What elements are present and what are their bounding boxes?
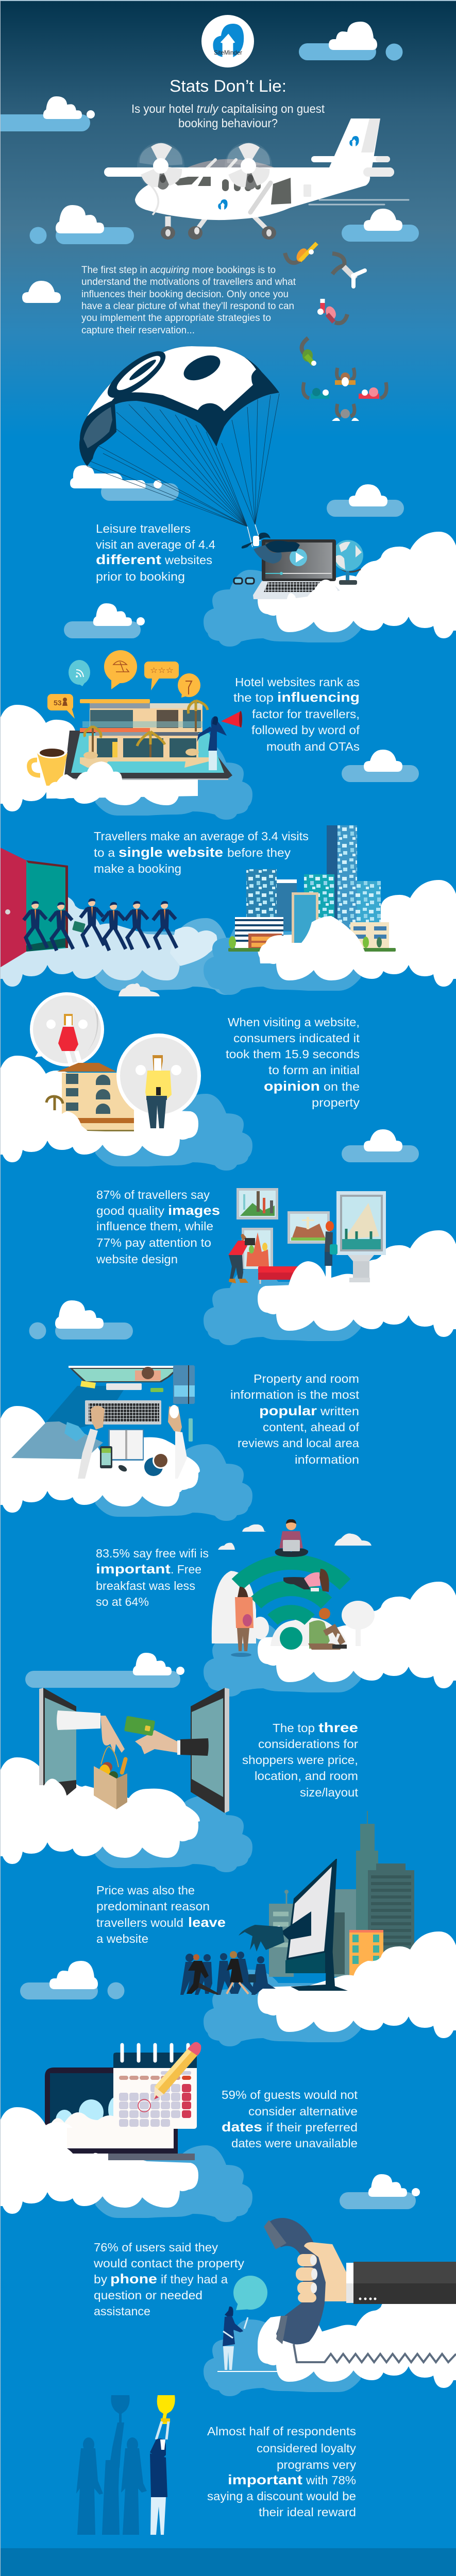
- cloud: lower right of plane: [342, 209, 419, 242]
- text: popular: reviews and local area: [238, 1436, 359, 1450]
- text: hotel websites: [233, 675, 360, 753]
- brick building: [248, 934, 282, 948]
- screen clouds: [50, 2097, 174, 2148]
- left edge: [0, 0, 1, 2576]
- text: single website: single website: [119, 844, 223, 860]
- cloud: left of leave: [20, 1961, 125, 1999]
- keyboard: [85, 1400, 161, 1425]
- laptop base: [76, 2154, 195, 2160]
- reaching hand: [239, 1911, 311, 1952]
- laptop screen: [262, 539, 336, 581]
- text: opinion: property: [312, 1096, 360, 1109]
- skydiver 3: [317, 299, 347, 323]
- skydiver 2: [332, 253, 365, 286]
- towers: [246, 825, 381, 948]
- text: opinion: to form an initial: [268, 1063, 360, 1077]
- tail fin: [329, 118, 380, 167]
- gallery illustration: [204, 1188, 456, 1345]
- text: images: 77% pay attention to: [96, 1236, 211, 1249]
- folders: [64, 1422, 86, 1442]
- subtitle: [131, 102, 325, 130]
- text: popular: information is the most: [230, 1388, 360, 1401]
- intro paragraph: have a clear picture of what they’ll respond to can: [81, 301, 294, 312]
- front cloud lobes: [46, 2136, 129, 2184]
- stabiliser: [311, 156, 390, 162]
- skydiver figure: [242, 524, 300, 564]
- text: opinion: consumers indicated it: [233, 1031, 360, 1045]
- lying woman: [283, 1569, 329, 1592]
- man: [145, 1055, 172, 1128]
- beach bubble: [104, 650, 137, 689]
- doorway: [26, 860, 67, 952]
- text: leisure travellers: different: [96, 552, 161, 567]
- white cloud: [258, 1230, 456, 1337]
- logo wordmark: SiteMinder: [214, 49, 242, 56]
- title: Stats Don’t Lie:: [170, 77, 286, 95]
- keyboard: [264, 582, 325, 592]
- runners: [24, 899, 177, 951]
- text: images: influence them, while: [96, 1219, 213, 1233]
- text: images: 87% of travellers say: [96, 1188, 210, 1201]
- trees and lobes: [251, 1601, 375, 1646]
- text: leisure travellers: visit an average of 4.4: [96, 538, 215, 551]
- tablets illustration: [0, 1688, 252, 1872]
- cloud: above tablets: [25, 1653, 184, 1688]
- cloud lobe behind foot: [351, 1961, 386, 1989]
- video play button: [290, 549, 307, 566]
- text: single website: to a: [94, 846, 115, 859]
- ground and trees: [228, 936, 396, 952]
- small cloud under city: [119, 983, 160, 996]
- weekday headers: [119, 2071, 191, 2080]
- cloud: lower left of plane: [30, 205, 134, 244]
- text: loyalty: Almost half of respondents: [207, 2425, 356, 2438]
- back cloud: [95, 918, 252, 995]
- suspension lines: [87, 394, 279, 527]
- text: opinion: [226, 1015, 360, 1109]
- white cloud: [0, 1757, 198, 1864]
- stars bubble: ☆☆☆: [150, 666, 174, 675]
- man in green: [308, 1608, 347, 1650]
- woman with megaphone: [197, 711, 242, 770]
- glasses: [234, 578, 254, 584]
- text: leave: travellers would: [96, 1916, 183, 1929]
- coffee: [144, 1452, 169, 1476]
- text: leisure travellers: Leisure travellers: [96, 522, 191, 535]
- text: dates: dates: [222, 2119, 262, 2134]
- text: leisure travellers: [96, 522, 215, 583]
- text: three considerations: three: [318, 1720, 358, 1735]
- cloud: top right: [299, 22, 403, 61]
- text: leave: predominant reason: [96, 1900, 210, 1913]
- desk illustration: [0, 1365, 252, 1521]
- propeller right: [224, 142, 274, 190]
- right tablet: [191, 1688, 229, 1813]
- back cloud: [204, 1268, 361, 1345]
- front cloud lobes: [52, 1111, 144, 1141]
- text: images: images: [168, 1202, 220, 1218]
- sky gradient: [0, 0, 456, 438]
- pale dome left: [212, 1571, 256, 1643]
- text: hotel websites: followed by word of: [251, 723, 360, 737]
- text: leave: leave: [188, 1914, 226, 1930]
- footer call to action band: [0, 2548, 456, 2576]
- white cloud: [258, 2281, 456, 2388]
- intro paragraph: [81, 265, 296, 336]
- cloud: right of dates: [340, 2174, 420, 2209]
- right sleeve: [175, 1431, 187, 1479]
- plane: [104, 118, 409, 240]
- laptop bottom bezel: [67, 2148, 178, 2154]
- white cloud: [258, 1931, 456, 2038]
- wing shadow: [167, 159, 295, 198]
- intro paragraph: The first step in acquiring more bookings is to: [81, 265, 276, 276]
- hotel opinion illustration: [0, 992, 252, 1171]
- text: loyalty: programs very: [277, 2458, 357, 2471]
- left hand: [91, 1405, 105, 1430]
- text: popular: information: [295, 1453, 359, 1466]
- logo badge: [201, 15, 254, 67]
- text: dates: 59% of guests would not: [222, 2088, 358, 2102]
- door and runners illustration: [0, 848, 252, 995]
- front cloud lobes: [286, 580, 341, 608]
- phone illustration: [204, 2218, 456, 2396]
- top edge: [0, 0, 456, 1]
- weekend cells: [182, 2084, 191, 2118]
- pen: [189, 1418, 193, 1442]
- picture: statue: [288, 1211, 330, 1244]
- monitor: [285, 1859, 348, 1991]
- hotel on tablet: [80, 699, 209, 768]
- guests bubble: [47, 694, 75, 719]
- text: single website: Travellers make an average of 3.4 visits: [94, 829, 309, 843]
- credit card: [124, 1716, 155, 1736]
- text: dates: dates were unavailable: [231, 2137, 358, 2150]
- door: [0, 848, 26, 968]
- white cloud: [258, 880, 456, 987]
- back cloud: [95, 1094, 252, 1171]
- eraser: [117, 1464, 128, 1473]
- back cloud: [204, 1970, 361, 2046]
- sleeve: [346, 2262, 456, 2304]
- phone cord: [294, 2344, 456, 2362]
- text: three considerations: [242, 1720, 359, 1799]
- white cloud: [258, 1582, 456, 1688]
- silhouette group: [76, 2395, 147, 2535]
- running man: [187, 1954, 219, 1995]
- text: opinion: opinion: [264, 1078, 320, 1094]
- text: wifi: [96, 1547, 209, 1608]
- cloud: left of parachute: [70, 465, 179, 501]
- text: phone: would contact the property: [93, 2257, 245, 2270]
- trophy: [157, 2395, 175, 2424]
- front cloud lobes: [259, 916, 365, 963]
- text: wifi: so at 64%: [96, 1595, 149, 1608]
- skydiver group: [303, 368, 386, 421]
- floor line: [217, 2371, 278, 2372]
- parachute: [79, 344, 279, 527]
- cockpit windows: [172, 174, 211, 186]
- speech bubble: [233, 2276, 267, 2310]
- back cloud: [204, 570, 361, 647]
- palm: [304, 2244, 346, 2301]
- back cloud: [95, 743, 252, 820]
- man on top: [275, 1519, 308, 1557]
- canopy logo: [101, 344, 172, 405]
- cloud: white left of intro: [22, 281, 61, 303]
- logo mark: [213, 24, 244, 57]
- white hump: [80, 1436, 200, 1494]
- text: popular: content, ahead of: [263, 1420, 360, 1434]
- cloud: right of hotel: [342, 750, 419, 782]
- globe: [332, 540, 363, 585]
- monitor city illustration: [180, 1811, 456, 2046]
- engine left: [156, 168, 170, 190]
- canopy hole: [180, 350, 224, 385]
- wifi symbol: [237, 1562, 345, 1650]
- striped building: [235, 917, 283, 948]
- text: images: website design: [96, 1252, 178, 1266]
- text: loyalty: considered loyalty: [257, 2442, 357, 2455]
- cabin windows: [222, 179, 261, 191]
- text: leisure travellers: prior to booking: [96, 570, 185, 583]
- skydiver with laptop: [204, 524, 456, 647]
- beige building: [350, 922, 389, 948]
- monitor: [69, 1366, 179, 1390]
- text: single website: before they: [227, 846, 291, 859]
- text: loyalty: [207, 2425, 357, 2519]
- tablet: [64, 731, 232, 779]
- cloud: right of opinion: [342, 1129, 419, 1162]
- intro paragraph: capture their reservation...: [81, 325, 195, 336]
- text: dates: consider alternative: [248, 2105, 358, 2118]
- woman: [223, 2307, 248, 2370]
- right arm: [135, 1730, 209, 1756]
- shopping bag: [94, 1747, 128, 1809]
- video progress bar: [265, 572, 331, 575]
- cocktail bubble: [178, 673, 200, 698]
- coffee mug: [29, 744, 67, 786]
- subtitle: Is your hotel truly capitalising on guest: [131, 102, 325, 115]
- text: phone: [93, 2241, 245, 2318]
- picture: landmarks: [237, 1188, 278, 1219]
- text: single website: make a booking: [94, 862, 181, 875]
- guests bubble: 53: [54, 699, 62, 707]
- intro paragraph: understand the motivations of travellers and what: [81, 277, 296, 287]
- text: dates: if their preferred: [266, 2121, 358, 2134]
- text: wifi: . Free: [171, 1563, 201, 1576]
- text: phone: 76% of users said they: [94, 2241, 218, 2254]
- text: wifi: 83.5% say free wifi is: [96, 1547, 209, 1560]
- cloud: lower left of gallery: [29, 1300, 133, 1340]
- text: wifi: important: [96, 1561, 171, 1577]
- door: [271, 178, 291, 205]
- text: popular: written: [320, 1404, 359, 1418]
- text: opinion: took them 15.9 seconds: [226, 1047, 360, 1061]
- nose arc: [151, 185, 158, 215]
- text: popular: [230, 1372, 360, 1466]
- text: hotel websites: mouth and OTAs: [266, 740, 360, 753]
- hotel building: [46, 1063, 134, 1131]
- text: single website: [94, 829, 309, 875]
- stars bubble: [144, 662, 179, 690]
- orange building: [349, 1930, 383, 1985]
- front cloud lobes: [26, 1778, 155, 1834]
- phone: [100, 1446, 112, 1468]
- laptop screen: [50, 2073, 174, 2148]
- trophy illustration: [76, 2395, 175, 2535]
- wing struts: [206, 160, 236, 169]
- text: leave: [96, 1884, 226, 1945]
- picture: cathedral: [242, 1228, 273, 1269]
- desk shadow: [46, 1386, 126, 1432]
- text: phone: by: [94, 2273, 108, 2286]
- text: hotel websites: Hotel websites rank as: [235, 675, 360, 689]
- text: phone: if they had a: [161, 2273, 228, 2286]
- text: hotel websites: influencing: [277, 689, 360, 705]
- text: loyalty: with 78%: [306, 2473, 356, 2487]
- text: hotel websites: factor for travellers,: [252, 707, 360, 721]
- landing gear: [161, 212, 276, 240]
- column: [348, 1255, 374, 1282]
- mountain shadow: [11, 1421, 103, 1459]
- city skyline: [269, 1811, 414, 1977]
- white cloud: [0, 1406, 198, 1513]
- canopy: [79, 346, 279, 466]
- cloud: right of parachute: [327, 484, 404, 517]
- skydiver 1: [285, 243, 317, 264]
- text: opinion: When visiting a website,: [228, 1015, 360, 1029]
- cloud: upper left: [0, 96, 95, 131]
- white cloud: [0, 1056, 198, 1162]
- text: phone: question or needed: [94, 2289, 202, 2302]
- text: popular: popular: [259, 1403, 317, 1418]
- open notebook: [108, 1429, 144, 1461]
- city illustration: [204, 825, 456, 995]
- right hand: [168, 1406, 182, 1432]
- speed lines: [309, 200, 409, 205]
- calendar illustration: [0, 2042, 252, 2222]
- text: loyalty: important: [228, 2472, 302, 2487]
- white cloud: [0, 705, 198, 811]
- left arm: [57, 1710, 125, 1754]
- white shelf lobes: [67, 1786, 200, 1834]
- pale cloud right lobe: [170, 927, 217, 966]
- back cloud: [204, 918, 361, 995]
- engine right: [243, 168, 258, 190]
- skydiver 4: [302, 338, 316, 366]
- text: three considerations: shoppers were price,: [242, 1753, 358, 1767]
- canopy side panel: [83, 407, 112, 448]
- spiral notebook: [173, 1365, 195, 1404]
- small sky clouds near wifi: [218, 1524, 371, 1550]
- hotel website illustration: [0, 650, 252, 820]
- standing woman: [231, 1587, 254, 1657]
- date cells: [119, 2084, 180, 2127]
- pencil: [154, 2042, 201, 2099]
- cloud: above hotel section: [64, 603, 145, 638]
- text: wifi: breakfast was less: [96, 1579, 195, 1592]
- subtitle: booking behaviour?: [178, 116, 278, 130]
- picture: mountain: [336, 1191, 386, 1255]
- text: leave: a website: [96, 1932, 148, 1945]
- back cloud: [95, 1795, 252, 1872]
- white cloud: [258, 532, 456, 638]
- text: loyalty: saying a discount would be: [207, 2489, 356, 2503]
- text: leisure travellers: websites: [164, 553, 212, 567]
- red bench: [258, 1266, 301, 1284]
- intro paragraph: influences their booking decision. Only once you: [81, 289, 289, 300]
- text: leave: Price was also the: [96, 1884, 195, 1897]
- handset: [264, 2218, 326, 2344]
- running woman: [227, 1951, 256, 1994]
- intro paragraph: you implement the appropriate strategies to: [81, 313, 271, 324]
- text: images: good quality: [96, 1204, 165, 1217]
- calendar: [113, 2042, 201, 2129]
- crowd: [180, 1951, 276, 1995]
- text: three considerations: location, and room: [255, 1769, 358, 1783]
- wifi bubble: [69, 660, 90, 686]
- back cloud: [204, 2319, 361, 2396]
- text: three considerations: considerations for: [258, 1737, 358, 1751]
- upper wing: [104, 167, 394, 177]
- woman with trophy: [150, 2421, 168, 2535]
- text: hotel websites: the top: [233, 691, 274, 704]
- laptop frame: [45, 2067, 178, 2155]
- laptop screen bottom: [67, 2128, 174, 2148]
- text: three considerations: The top: [273, 1721, 315, 1735]
- text: phone: assistance: [94, 2304, 150, 2318]
- front cloud lobes: [289, 1261, 337, 1288]
- text: opinion: on the: [324, 1080, 360, 1093]
- laptop base right: [108, 2154, 195, 2160]
- text: popular: Property and room: [254, 1372, 359, 1385]
- back cloud: [204, 1620, 361, 1697]
- photographer: [228, 1234, 255, 1283]
- text: phone: phone: [110, 2271, 157, 2286]
- pale cloud: [0, 880, 198, 987]
- white cloud: [0, 2107, 198, 2214]
- speech bubble man: [116, 1033, 201, 1118]
- canopy white panel: [87, 346, 256, 416]
- rear panel: [303, 184, 311, 197]
- left sleeve: [78, 1429, 98, 1479]
- mouse: [170, 1405, 179, 1418]
- laptop base: [253, 581, 340, 599]
- back cloud: [95, 2145, 252, 2222]
- text: images: [96, 1188, 220, 1266]
- wifi illustration: [204, 1519, 456, 1697]
- fuselage logo: [218, 199, 228, 210]
- text: three considerations: size/layout: [300, 1786, 359, 1799]
- back cloud: [95, 1444, 252, 1521]
- propeller left: [137, 142, 186, 190]
- tail logo: [349, 136, 359, 146]
- text: dates: [222, 2088, 358, 2150]
- sticky note and usb: [80, 1381, 163, 1392]
- fuselage: [135, 167, 370, 220]
- circled date: [138, 2099, 150, 2112]
- front cloud lobes: [46, 761, 198, 799]
- text: loyalty: their ideal reward: [259, 2505, 356, 2519]
- fingers and thumb: [296, 2242, 340, 2302]
- woman viewing: [325, 1221, 337, 1284]
- speech bubble woman: [30, 992, 104, 1069]
- cloud extra lobes: [258, 2315, 361, 2349]
- left tablet: [39, 1688, 76, 1795]
